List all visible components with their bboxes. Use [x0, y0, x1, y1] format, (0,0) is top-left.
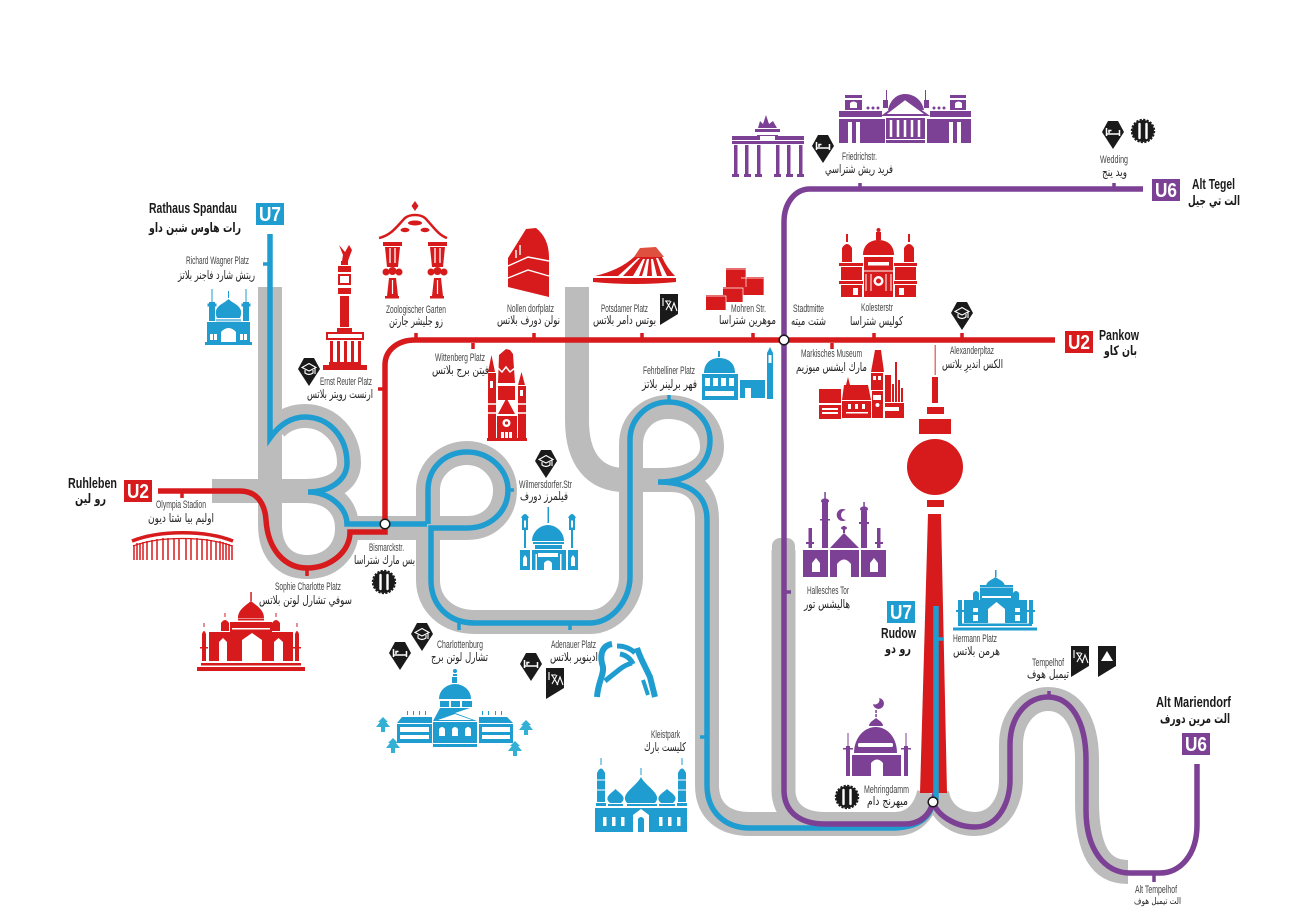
line badge U7 top: U7: [259, 204, 281, 226]
icon: tent flag Tempelhof: [1098, 646, 1116, 677]
landmark: Kleistpark mosque: [595, 758, 687, 832]
station: Wittenberg Platz: [432, 352, 489, 378]
station: Richard Wagner Platz: ريتش شارد فاجنر بلاتز: [177, 268, 255, 283]
terminus: Rudow: رو دو: [884, 642, 911, 657]
terminus: Alt Mariendorf: Alt Mariendorf: [1156, 694, 1232, 711]
station: Olympia Stadion: [148, 499, 214, 526]
icon: bed pin Charlottenburg: [389, 642, 411, 670]
icon: translate flag Potsdamer: [660, 294, 678, 325]
terminus: Pankow: بان كاو: [1103, 344, 1137, 359]
landmark: Hallesches mosque: [803, 492, 886, 577]
landmark: Olympia Stadium: [132, 533, 233, 560]
station: Potsdamer Platz: [593, 303, 656, 328]
line U6 purple: [784, 183, 1197, 882]
line U7 blue: [263, 234, 943, 828]
landmark: Wilmersdorfer mosque: [520, 507, 578, 570]
station: Kolesterstr: [850, 302, 903, 329]
station: Kolesterstr: كوليس شتراسا: [850, 314, 903, 329]
station: Wilmersdorfer Str: [519, 479, 572, 504]
landmark: Mohren boxes: [706, 268, 764, 310]
station: Friedrichstr: [825, 151, 893, 177]
terminus: Alt Mariendorf: [1156, 694, 1232, 727]
station: Nollendorfplatz: Nollen dorfplatz: [507, 303, 554, 315]
station: Olympia Stadion: اوليم بيا شتا ديون: [148, 511, 214, 526]
terminus: Alt Tegel: [1188, 176, 1240, 209]
station: Olympia Stadion: Olympia Stadion: [156, 499, 206, 511]
station: Wilmersdorfer Str: فيلمرز دورف: [520, 489, 568, 504]
station: Hallesches Tor: Hallesches Tor: [807, 585, 849, 597]
landmark: Memorial church: [487, 349, 527, 441]
landmark: Reichstag: [839, 90, 971, 143]
terminus: Rathaus Spandau: رات هاوس شبن داو: [148, 221, 241, 236]
station: Markisches Museum: مارك ايشس ميوزيم: [796, 360, 867, 375]
station: Markisches Museum: [796, 348, 867, 375]
station: Wedding: Wedding: [1100, 154, 1128, 166]
station: Adenauer Platz: [550, 639, 598, 665]
landmark: Brandenburg Gate: [732, 115, 804, 177]
terminus: Rudow: Rudow: [881, 625, 916, 642]
station: Alt Tempelhof: الت تيمبل هوف: [1134, 897, 1181, 907]
station: Potsdamer Platz: بوتس دامر بلاتس: [593, 313, 656, 328]
station: Charlottenburg: تشارل لوتن برج: [431, 650, 488, 665]
station: Potsdamer Platz: Potsdamer Platz: [601, 303, 648, 315]
terminus: Rathaus Spandau: [148, 200, 241, 236]
station: Ernst Reuter Platz: [307, 376, 373, 402]
station: Friedrichstr: Friedrichstr.: [842, 151, 877, 163]
station: Fehrbelliner Platz: Fehrbelliner Platz: [643, 365, 695, 377]
station: Hallesches Tor: [803, 585, 850, 612]
landmark: Chain sculpture: [597, 644, 655, 697]
line badge U6 bottom: U6: [1185, 734, 1207, 756]
station: Richard Wagner Platz: Richard Wagner Platz: [186, 255, 249, 267]
station: Alexanderplatz: الكس انديرِ بلاتس: [942, 357, 1003, 373]
icon: cap pin Ernst Reuter: [298, 358, 320, 386]
station: Zoologischer Garten: زو جليشر جارتن: [389, 314, 443, 329]
landmark: Hermann mosque: [953, 570, 1037, 630]
station: Wilmersdorfer Str: Wilmersdorfer.Str: [519, 479, 572, 491]
icon: translate flag Tempelhof: [1071, 646, 1089, 677]
station: Ernst Reuter Platz: ارنست رويتر بلاتس: [307, 387, 373, 402]
landmark: Mehringdamm mosque: [843, 698, 911, 776]
terminus: Rudow: [881, 625, 916, 657]
station: Bismarckstr: Bismarckstr.: [369, 542, 404, 554]
station: Hallesches Tor: هاليشس تور: [803, 597, 850, 612]
station: Stadtmitte: شتت ميته: [791, 314, 826, 328]
terminus: Alt Tegel: Alt Tegel: [1192, 176, 1235, 193]
line badge U2 right: U2: [1068, 332, 1090, 354]
station: Zoologischer Garten: [386, 304, 446, 329]
station: Bismarckstr: بس مارك شتراسا: [354, 553, 415, 568]
station: Wedding: [1100, 154, 1128, 180]
station: Ernst Reuter Platz: Ernst Reuter Platz: [320, 376, 372, 388]
terminus: Alt Mariendorf: الت مرين دورف: [1160, 712, 1230, 727]
landmark: Märkisches Museum: [819, 350, 904, 419]
landmark: Dom: [839, 228, 917, 297]
station: Wittenberg Platz: Wittenberg Platz: [435, 352, 485, 364]
landmark: Wagner mosque: [205, 289, 252, 345]
icon: translate flag Adenauer: [546, 668, 564, 699]
station: Alexanderplatz: [942, 345, 1003, 373]
station: Mehringdamm: ميهرنج دام: [867, 794, 908, 809]
terminus: Pankow: Pankow: [1099, 327, 1139, 344]
TV tower: [907, 345, 963, 793]
station: Charlottenburg: Charlottenburg: [437, 639, 483, 651]
station: Tempelhof: [1027, 657, 1069, 682]
terminus: Pankow: [1099, 327, 1139, 359]
station: Stadtmitte: Stadtmitte: [793, 303, 824, 315]
station: Hermann Platz: [953, 633, 1000, 659]
station: Sophie Charlotte Platz: [259, 581, 352, 608]
station: Sophie Charlotte Platz: Sophie Charlotte Platz: [275, 581, 341, 593]
icon: bed pin Friedrichstr: [812, 135, 834, 163]
grey route ribbon: [212, 287, 1128, 872]
station: Wedding: ويد ينج: [1102, 165, 1127, 180]
terminus: Alt Tegel: الت تي جيل: [1188, 194, 1240, 209]
station: Mohren Str.: [719, 303, 776, 328]
station: Mohren Str.: موهرين شتراسا: [719, 313, 776, 328]
terminus: Ruhleben: [68, 475, 117, 507]
station: Fehrbelliner Platz: [641, 365, 697, 392]
landmark: Nollendorf building: [508, 228, 549, 297]
station: Friedrichstr: فريد ريش شتراسي: [825, 162, 893, 177]
station: Tempelhof: Tempelhof: [1032, 657, 1065, 669]
station: Mohren Str.: Mohren Str.: [731, 303, 766, 315]
line badge U7 bottom: U7: [890, 602, 912, 624]
station: Tempelhof: تيمبل هوف: [1027, 667, 1069, 682]
icon: cap pin Wilmersdorfer: [535, 450, 557, 478]
line badge U2 left: U2: [127, 481, 149, 503]
terminus: Ruhleben: Ruhleben: [68, 475, 117, 492]
station: Markisches Museum: Markisches Museum: [801, 348, 862, 360]
icon: food badge Wedding: [1132, 120, 1154, 142]
icon: food badge Mehringdamm: [836, 786, 858, 808]
icon: food badge Bismarckstr: [372, 570, 396, 594]
station: Nollendorfplatz: نولن دورف بلاتس: [497, 313, 560, 328]
station: Charlottenburg: [431, 639, 488, 665]
station: Adenauer Platz: ادينوير بلاتس: [550, 650, 598, 665]
landmark: Victory Column: [323, 245, 367, 370]
icon: bed pin Adenauer: [520, 653, 542, 681]
landmark: Sophie Charlotte palace: [197, 592, 305, 671]
station: Wittenberg Platz: فيتن برج بلاتس: [432, 363, 489, 378]
station: Hermann Platz: هرمن بلاتس: [953, 644, 1000, 659]
icon: cap pin Alexanderplatz: [951, 302, 973, 330]
terminus: Rathaus Spandau: Rathaus Spandau: [149, 200, 237, 217]
station: Richard Wagner Platz: [177, 255, 255, 283]
station: Bismarckstr: [354, 542, 415, 568]
station: Zoologischer Garten: Zoologischer Garten: [386, 304, 446, 316]
station: Alt Tempelhof: Alt Tempelhof: [1135, 884, 1178, 896]
line badge U6 top: U6: [1155, 180, 1177, 202]
station: Kleistpark: Kleistpark: [651, 729, 680, 741]
station: Kleistpark: كليست بارك: [644, 740, 686, 755]
station: Kleistpark: [644, 729, 686, 755]
landmark: Charlottenburg palace: [376, 669, 533, 756]
station: Mehringdamm: Mehringdamm: [864, 784, 909, 796]
station: Adenauer Platz: Adenauer Platz: [551, 639, 596, 651]
station: Kolesterstr: Kolesterstr: [861, 302, 893, 314]
line U2 red: [158, 333, 1055, 576]
station: Stadtmitte: [791, 303, 826, 328]
terminus: Ruhleben: رو لين: [75, 492, 106, 507]
station: Sophie Charlotte Platz: سوفي تشارل لوتن بلاتس: [259, 593, 352, 608]
interchange stations: [380, 335, 938, 807]
landmark: Circus tent: [593, 247, 676, 284]
station: Nollendorfplatz: [497, 303, 560, 328]
icon: cap pin Charlottenburg: [411, 623, 433, 651]
station: Fehrbelliner Platz: فهر برلينر بلاتز: [641, 377, 697, 392]
station: Alt Tempelhof: [1134, 884, 1181, 907]
landmark: Zoo gate: [379, 201, 448, 298]
landmark: Fehrbelliner mosque: [702, 347, 773, 400]
station: Mehringdamm: [864, 784, 909, 809]
station: Hermann Platz: Hermann Platz: [953, 633, 997, 645]
station: Alexanderplatz: Alexanderpltaz: [950, 345, 994, 357]
icon: bed pin Wedding: [1102, 121, 1124, 149]
